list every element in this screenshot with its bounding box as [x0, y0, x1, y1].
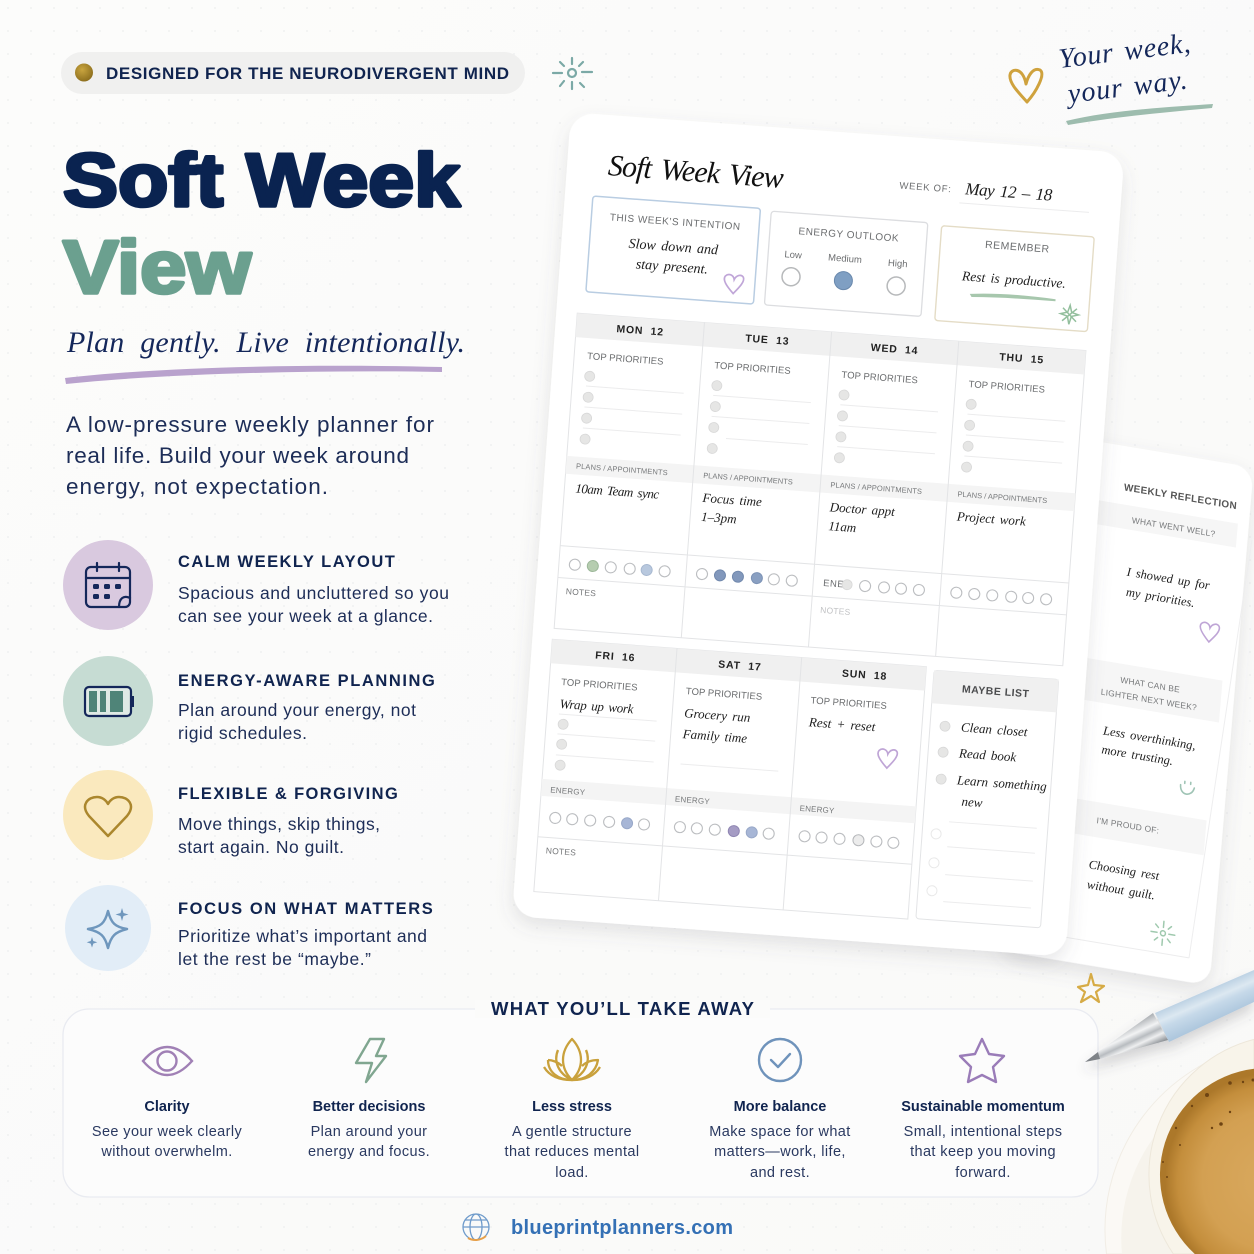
icon: star	[960, 1039, 1004, 1082]
day column: monday: NOTES	[566, 586, 597, 598]
icon: teal sun doodle	[553, 58, 592, 89]
footer: website	[463, 1214, 733, 1240]
takeaway: sustainable momentum: that keep you moving	[910, 1144, 1056, 1160]
day column: wednesday: 11am	[828, 518, 857, 535]
day column: saturday: ENERGY	[675, 795, 711, 806]
day column: monday: TOP PRIORITIES	[587, 351, 664, 368]
day column: saturday: Family time	[681, 726, 748, 746]
icon: gold heart	[1010, 69, 1042, 102]
intro paragraph: energy, not expectation.	[66, 474, 328, 499]
day column: wednesday: ENE	[823, 578, 845, 590]
icon: check circle	[759, 1039, 801, 1081]
takeaway: more balance: and rest.	[750, 1165, 810, 1181]
takeaway: more balance: More balance	[734, 1099, 826, 1115]
day column: saturday: Grocery run	[684, 705, 751, 725]
feature: energy-aware planning: ENERGY-AWARE PLANNING	[178, 672, 436, 690]
subtitle: plan gently, live intentionally	[65, 326, 465, 384]
box: energy outlook: Medium	[828, 252, 862, 266]
maybe list	[916, 670, 1059, 928]
section: proud of: without guilt.	[1087, 877, 1155, 903]
day column: wednesday: PLANS / APPOINTMENTS	[830, 480, 922, 496]
panel: weekly reflection back card: WEEKLY REFLECTION	[1123, 482, 1238, 512]
takeaway: less stress: Less stress	[532, 1099, 612, 1115]
feature: calm weekly layout: can see your week at a glance.	[178, 606, 433, 626]
day column: saturday: TOP PRIORITIES	[685, 686, 763, 703]
day column: thursday: TOP PRIORITIES	[968, 379, 1046, 396]
feature: flexible and forgiving: start again. No guilt.	[178, 837, 344, 857]
day column: thursday: THU 15	[999, 351, 1044, 367]
feature: focus on what matters	[65, 885, 434, 971]
feature: flexible and forgiving: FLEXIBLE & FORGIVING	[178, 785, 399, 803]
week grid: friday to sunday	[534, 639, 926, 919]
day column: friday: FRI 16	[595, 649, 636, 664]
section: what can be lighter: LIGHTER NEXT WEEK?	[1100, 687, 1197, 713]
takeaway: sustainable momentum	[901, 1039, 1065, 1181]
day column: saturday: SAT 17	[718, 659, 762, 674]
box: remember: Rest is productive.	[961, 268, 1066, 291]
day column: monday: MON 12	[616, 323, 664, 339]
purple brush underline	[65, 366, 442, 384]
takeaway: less stress: A gentle structure	[512, 1124, 632, 1140]
day column: friday	[545, 647, 662, 863]
feature: energy-aware planning: Plan around your energy, not	[178, 700, 416, 720]
day column: monday: 10am Team sync	[575, 481, 660, 502]
feature: calm weekly layout: Spacious and uncluttered so you	[178, 583, 449, 603]
week of: May 12 – 18	[964, 179, 1053, 205]
day column: wednesday: Doctor appt	[828, 499, 896, 519]
feature: calm weekly layout: CALM WEEKLY LAYOUT	[178, 553, 396, 571]
feature: calm weekly layout	[63, 540, 449, 630]
intro paragraph: A low-pressure weekly planner for	[66, 412, 434, 437]
takeaway: clarity: without overwhelm.	[100, 1144, 233, 1160]
box: energy outlook: High	[888, 258, 908, 270]
section: proud of	[1020, 791, 1207, 951]
day column: saturday	[673, 656, 787, 840]
icon: sparkle	[65, 885, 151, 971]
badge: designed for the neurodivergent mind: DESIGNED FOR THE NEURODIVERGENT MIND	[106, 64, 509, 83]
day column: sunday: ENERGY	[799, 804, 835, 815]
takeaway: sustainable momentum: Sustainable momentum	[901, 1099, 1065, 1115]
section: what can be lighter	[1033, 651, 1223, 799]
section: what can be lighter: Less overthinking,	[1102, 723, 1196, 753]
day column: wednesday	[820, 340, 943, 622]
section: proud of: Choosing rest	[1088, 857, 1160, 883]
panel: weekly reflection back card	[997, 432, 1254, 986]
icon: lightning bolt	[356, 1039, 386, 1082]
takeaway: clarity: Clarity	[144, 1099, 190, 1115]
day column: sunday: SUN 18	[842, 668, 888, 683]
section: what can be lighter: WHAT CAN BE	[1120, 675, 1180, 695]
maybe list: Learn something	[956, 772, 1048, 794]
section: what went well	[1046, 493, 1238, 645]
section: what can be lighter: more trusting.	[1101, 742, 1174, 768]
day column: monday	[566, 321, 688, 604]
week of: WEEK OF:	[899, 180, 952, 195]
section: proud of: I’M PROUD OF:	[1096, 815, 1160, 836]
day column: friday: NOTES	[545, 845, 577, 858]
takeaway: better decisions	[308, 1039, 430, 1160]
icon: heart	[63, 770, 153, 860]
day column: thursday	[950, 349, 1070, 605]
intro paragraph: real life. Build your week around	[66, 443, 409, 468]
box: this week's intention: stay present.	[635, 257, 708, 278]
green brush underline	[1066, 104, 1213, 125]
box: energy outlook: ENERGY OUTLOOK	[798, 226, 899, 245]
feature: energy-aware planning: rigid schedules.	[178, 723, 307, 743]
maybe list: new	[961, 794, 983, 810]
intro paragraph	[66, 412, 434, 499]
section: what went well: my priorities.	[1125, 585, 1195, 610]
day column: sunday: TOP PRIORITIES	[810, 695, 888, 712]
planner title: Soft Week View	[607, 149, 785, 195]
panel: main planner card	[512, 112, 1125, 957]
badge: designed for the neurodivergent mind	[61, 52, 525, 94]
icon: battery	[63, 656, 153, 746]
footer: website: blueprintplanners.com	[511, 1217, 733, 1239]
day column: wednesday: WED 14	[870, 342, 919, 357]
day column: tuesday: PLANS / APPOINTMENTS	[703, 471, 793, 486]
title: View	[63, 225, 252, 309]
maybe list: Clean closet	[960, 719, 1028, 739]
takeaway: more balance: matters—work, life,	[714, 1144, 846, 1160]
takeaway: clarity: See your week clearly	[92, 1124, 242, 1140]
week grid: monday to thursday	[554, 313, 1086, 666]
box: remember	[935, 226, 1094, 332]
feature: flexible and forgiving	[63, 770, 399, 860]
takeaway: sustainable momentum: forward.	[955, 1165, 1011, 1181]
maybe list: Read book	[958, 745, 1017, 765]
day column: wednesday: NOTES	[820, 605, 851, 617]
takeaway: better decisions: Better decisions	[313, 1099, 425, 1115]
box: this week's intention: Slow down and	[628, 237, 720, 258]
handwritten note	[1057, 28, 1192, 110]
takeaway: more balance	[709, 1039, 851, 1181]
day column: monday: PLANS / APPOINTMENTS	[576, 462, 668, 477]
takeaway: less stress: load.	[555, 1165, 589, 1181]
feature: flexible and forgiving: Move things, skip things,	[178, 814, 380, 834]
handwritten note: Your week,	[1057, 28, 1192, 75]
title: Soft Week	[63, 138, 460, 222]
day column: friday: Wrap up work	[559, 696, 634, 716]
day column: tuesday: Focus time	[701, 490, 763, 509]
takeaway: more balance: Make space for what	[709, 1124, 851, 1140]
icon: lotus	[544, 1039, 600, 1080]
feature: energy-aware planning	[63, 656, 436, 746]
section heading: WHAT YOU’LL TAKE AWAY	[491, 998, 755, 1019]
box: remember: REMEMBER	[985, 239, 1050, 256]
day column: wednesday: TOP PRIORITIES	[841, 370, 919, 386]
box: this week's intention	[586, 196, 760, 304]
box: energy outlook: Low	[784, 249, 802, 262]
icon: globe	[463, 1214, 489, 1240]
icon: eye	[143, 1047, 192, 1075]
day column: thursday: Project work	[955, 509, 1027, 529]
takeaway: better decisions: energy and focus.	[308, 1144, 430, 1160]
illustration: pen	[1085, 970, 1254, 1062]
day column: friday: ENERGY	[550, 786, 586, 797]
feature: focus on what matters: let the rest be “maybe.”	[178, 949, 371, 969]
day column: friday: TOP PRIORITIES	[561, 677, 638, 694]
week of	[899, 175, 1091, 212]
handwritten note: your way.	[1063, 65, 1189, 110]
panel: what you'll take away	[63, 998, 1098, 1197]
box: this week's intention: THIS WEEK’S INTENTION	[609, 212, 741, 233]
section: what went well: I showed up for	[1125, 565, 1210, 593]
icon: calendar	[63, 540, 153, 630]
day column: tuesday: 1–3pm	[701, 509, 737, 526]
subtitle: plan gently, live intentionally: Plan gently. Live intentionally.	[66, 326, 465, 359]
day column: tuesday	[696, 330, 816, 587]
box: energy outlook	[764, 211, 928, 316]
day column: tuesday: TOP PRIORITIES	[714, 360, 791, 377]
icon: gold star doodle	[1078, 974, 1104, 1002]
title	[63, 138, 460, 309]
maybe list: MAYBE LIST	[962, 683, 1030, 700]
takeaway: better decisions: Plan around your	[311, 1124, 427, 1140]
takeaway: less stress	[505, 1039, 639, 1181]
feature: focus on what matters: FOCUS ON WHAT MATTERS	[178, 900, 434, 918]
tagline note: your week, your way	[1010, 28, 1213, 125]
section: what went well: WHAT WENT WELL?	[1131, 515, 1216, 539]
illustration: coffee cup	[1105, 1039, 1254, 1254]
takeaway: sustainable momentum: Small, intentional steps	[904, 1124, 1062, 1140]
takeaway: less stress: that reduces mental	[505, 1144, 639, 1160]
feature: focus on what matters: Prioritize what’s important and	[178, 926, 427, 946]
day column: thursday: PLANS / APPOINTMENTS	[957, 490, 1048, 505]
takeaway: clarity	[92, 1047, 242, 1160]
day column: tuesday: TUE 13	[745, 333, 790, 348]
day column: sunday: Rest + reset	[807, 714, 876, 734]
day column: sunday	[797, 665, 911, 849]
